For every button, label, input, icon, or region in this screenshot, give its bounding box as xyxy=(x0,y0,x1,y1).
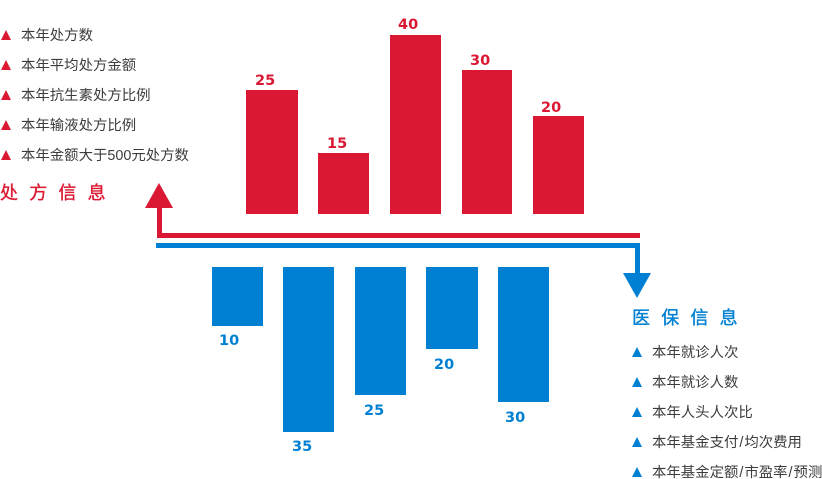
list item 5: 本年金额大于500元处方数 xyxy=(21,147,189,164)
blue bar values: 35 xyxy=(292,439,312,455)
list: medical insurance items xyxy=(632,344,822,479)
red bar values: 30 xyxy=(470,53,490,69)
red bar values xyxy=(255,17,561,152)
list item 1: 本年就诊人次 xyxy=(652,344,738,361)
blue bar values: 30 xyxy=(505,410,525,426)
blue bar values: 20 xyxy=(434,357,454,373)
list item 2: 本年平均处方金额 xyxy=(21,57,136,74)
red bar values: 40 xyxy=(398,17,418,33)
arrow: red up xyxy=(145,183,640,238)
blue bar values: 10 xyxy=(219,333,239,349)
list item 2: 本年就诊人数 xyxy=(652,374,738,391)
list item 3: 本年抗生素处方比例 xyxy=(21,87,151,104)
red bar values: 15 xyxy=(327,136,347,152)
blue bar values: 25 xyxy=(364,403,384,419)
arrow: blue down xyxy=(156,243,651,298)
list item 4: 本年基金支付/均次费用 xyxy=(652,434,802,451)
list item 3: 本年人头人次比 xyxy=(652,404,753,421)
blue bar values xyxy=(219,333,525,455)
list: prescription items xyxy=(1,27,189,164)
red bar chart xyxy=(246,35,584,214)
list item 4: 本年输液处方比例 xyxy=(21,117,136,134)
heading: medical insurance information: 医保信息 xyxy=(632,308,749,328)
list item 1: 本年处方数 xyxy=(21,27,93,44)
heading: prescription information: 处方信息 xyxy=(0,183,117,203)
red bar values: 20 xyxy=(541,100,561,116)
blue bar chart xyxy=(212,267,549,432)
red bar values: 25 xyxy=(255,73,275,89)
